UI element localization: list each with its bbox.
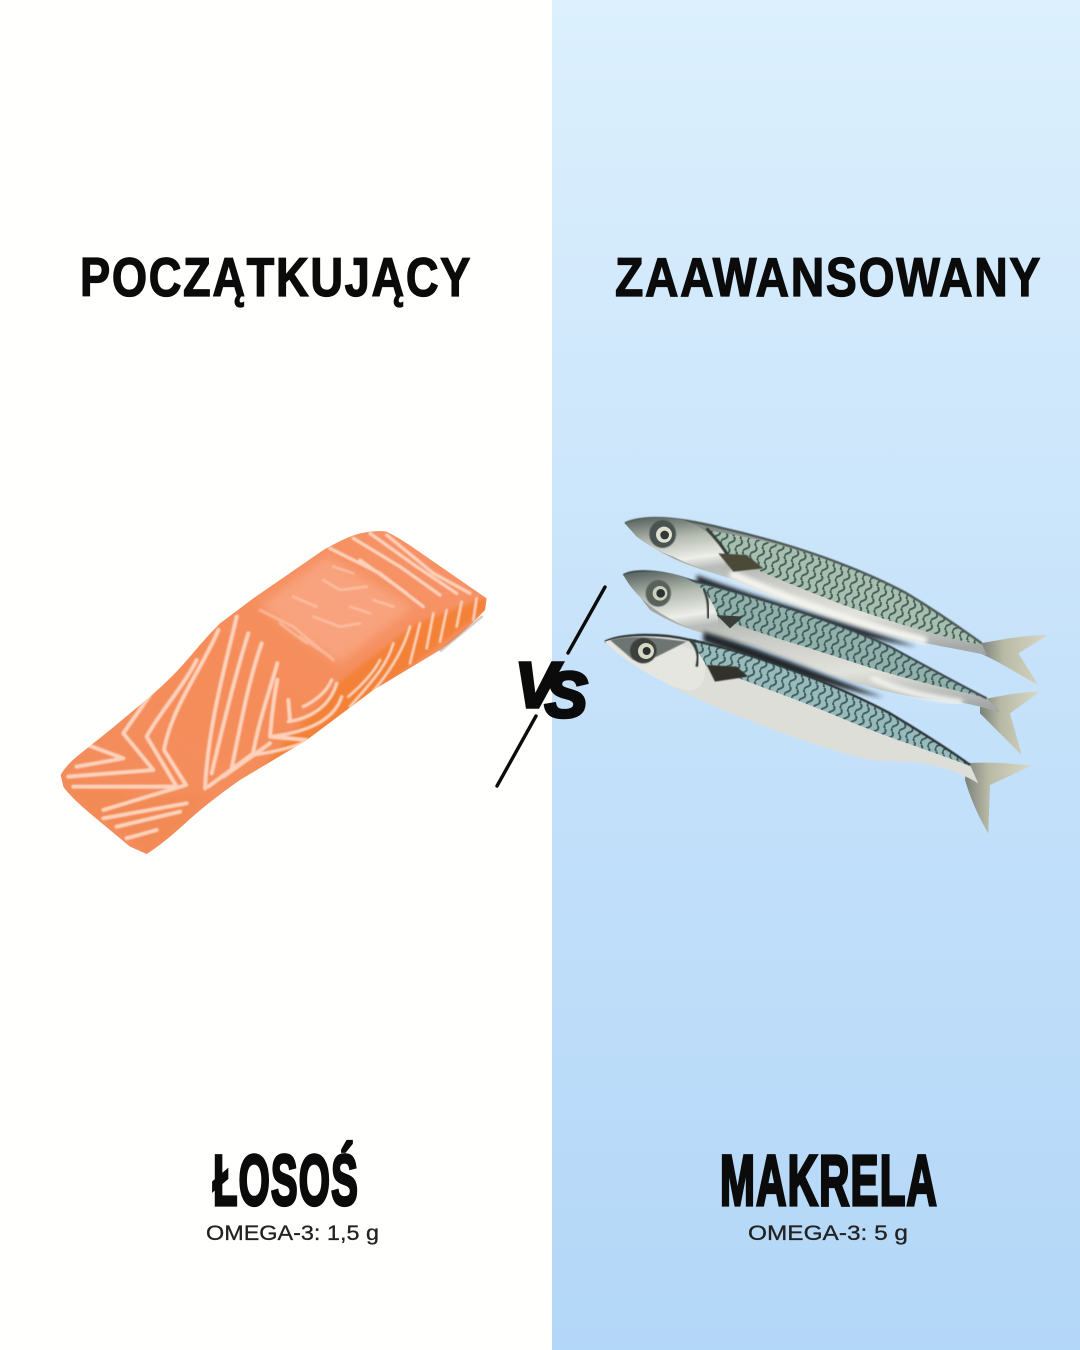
divider line: top xyxy=(568,587,605,653)
right side fan xyxy=(348,598,477,707)
fish 3 xyxy=(605,635,1032,833)
vs letters: V xyxy=(515,649,558,721)
fish 1 xyxy=(625,518,1048,685)
fish 2 xyxy=(623,571,1040,755)
label: mackerel omega-3: OMEGA-3: 5 g xyxy=(748,1222,908,1245)
illustration: salmon fillet xyxy=(60,531,487,854)
panel: right background xyxy=(552,0,1080,1350)
top right chevrons xyxy=(330,533,470,607)
shadow between fish 2 and 3 xyxy=(703,632,883,697)
heading: beginner: POCZĄTKUJĄCY xyxy=(80,246,472,308)
label: mackerel name: MAKRELA xyxy=(720,1142,938,1221)
panel: left background xyxy=(0,0,552,1350)
shadow between fish 1 and 2 xyxy=(697,575,917,647)
vs badge xyxy=(497,587,605,786)
vs letters: S xyxy=(545,659,588,731)
long diagonal fat lines xyxy=(68,617,307,838)
concentric arcs xyxy=(253,680,347,755)
mottled top texture xyxy=(260,567,393,660)
illustration: three mackerel xyxy=(605,518,1048,833)
divider line: bottom xyxy=(497,716,536,786)
label: salmon omega-3: OMEGA-3: 1,5 g xyxy=(206,1222,379,1245)
label: salmon name: ŁOSOŚ xyxy=(213,1142,359,1221)
